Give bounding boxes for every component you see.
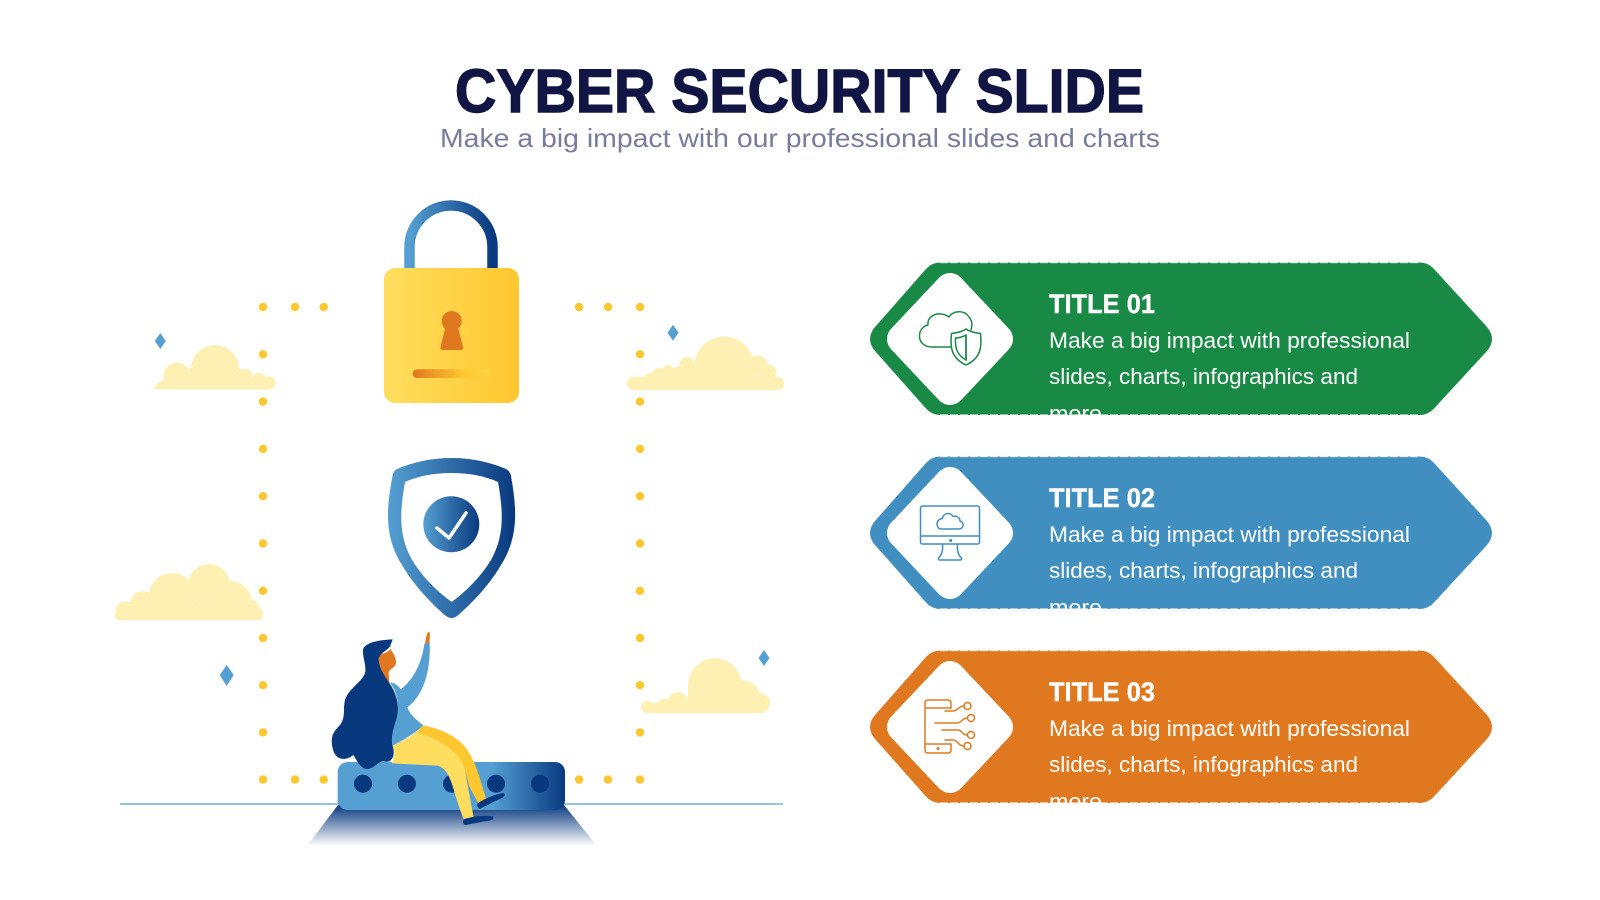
- description: slides, charts, infographics and: [1049, 558, 1358, 583]
- icon: padlock: [384, 205, 519, 403]
- icon: phone circuit: [925, 700, 974, 753]
- ground line: [120, 803, 783, 805]
- title: CYBER SECURITY SLIDE: [455, 57, 1144, 125]
- description: more: [1049, 789, 1102, 814]
- heading: TITLE 03: [1049, 677, 1155, 707]
- cloud: lower right: [641, 658, 770, 716]
- cloud: top left: [155, 345, 276, 390]
- description: Make a big impact with professional: [1049, 716, 1410, 741]
- icon: monitor with cloud: [920, 506, 980, 560]
- dotted frame: [259, 303, 644, 784]
- server base: [338, 762, 565, 810]
- icon: shield with check: [388, 458, 515, 618]
- panel: title 02: [870, 456, 1492, 620]
- description: Make a big impact with professional: [1049, 328, 1410, 353]
- description: more: [1049, 595, 1102, 620]
- cloud: top right: [627, 336, 784, 396]
- icon: cloud shield: [919, 312, 981, 365]
- person sitting on server: [332, 632, 505, 825]
- description: more: [1049, 401, 1102, 426]
- floor shadow: [307, 805, 597, 846]
- heading: TITLE 02: [1049, 483, 1155, 513]
- panel: title 01: [870, 262, 1492, 426]
- heading: TITLE 01: [1049, 289, 1155, 319]
- sparkles: [155, 325, 770, 686]
- subtitle: Make a big impact with our professional slides and charts: [440, 123, 1160, 153]
- cloud: lower left: [115, 564, 264, 625]
- description: slides, charts, infographics and: [1049, 364, 1358, 389]
- description: slides, charts, infographics and: [1049, 752, 1358, 777]
- description: Make a big impact with professional: [1049, 522, 1410, 547]
- panel: title 03: [870, 650, 1492, 814]
